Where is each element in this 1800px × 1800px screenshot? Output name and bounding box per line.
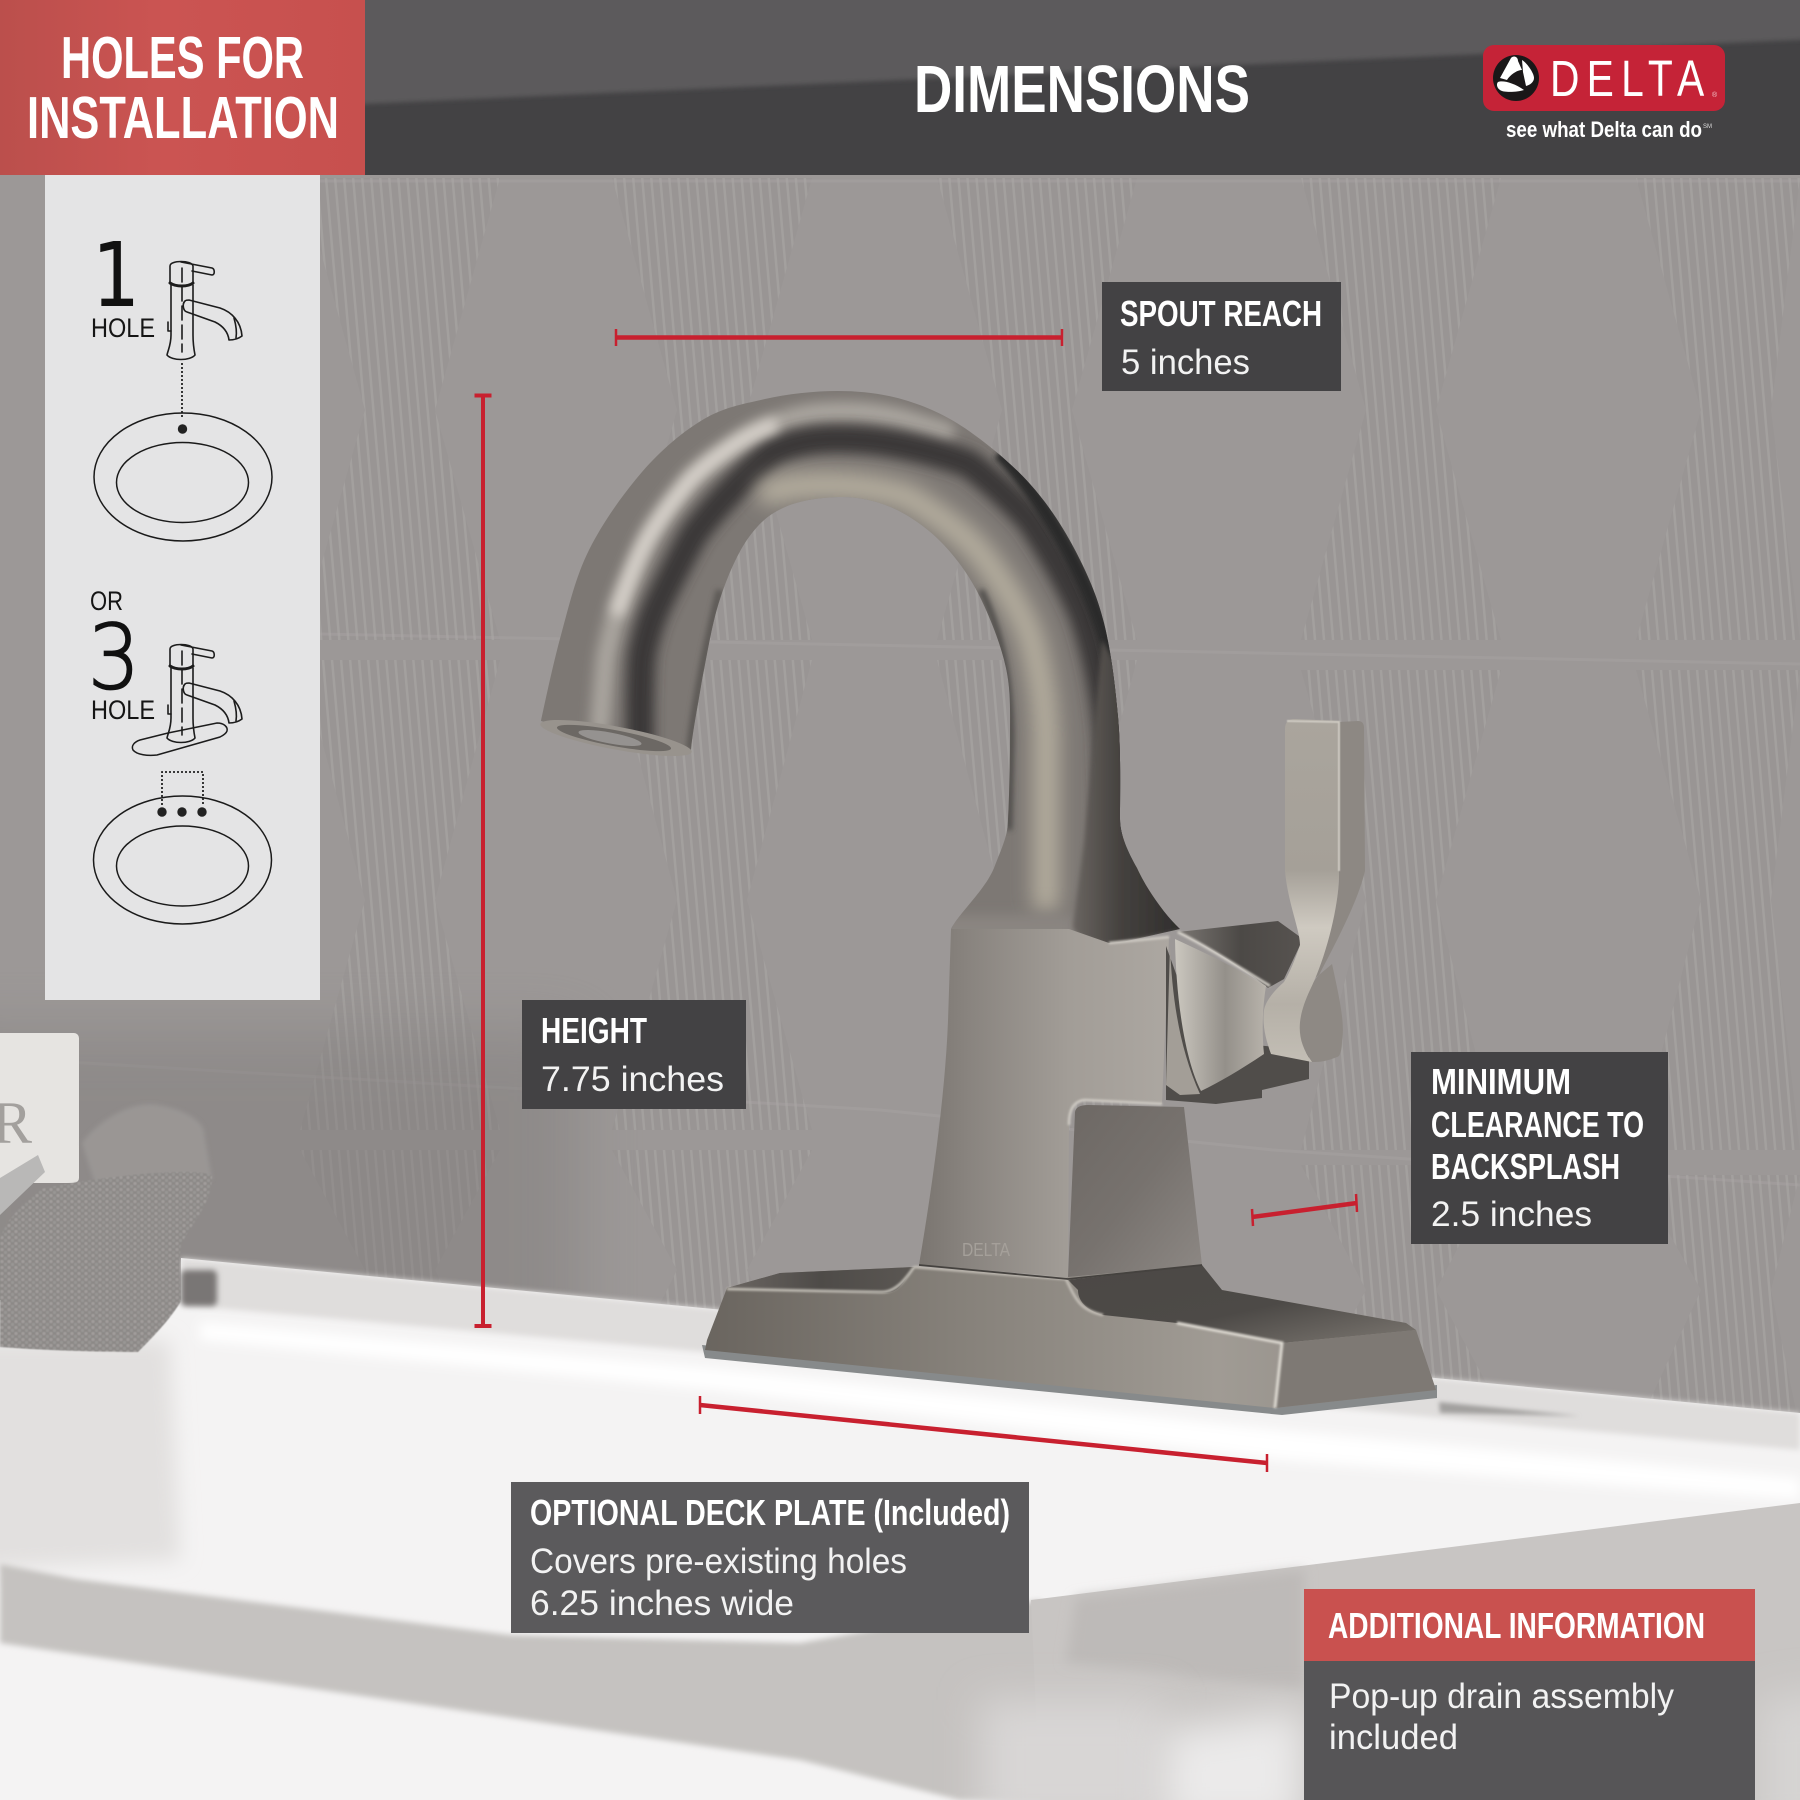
one hole option: HOLE — [91, 313, 155, 343]
engraved logo: DELTA — [962, 1240, 1010, 1260]
dimension line: height — [474, 395, 492, 1327]
callout: additional information — [1304, 1589, 1755, 1800]
icon: sink with one hole — [94, 363, 272, 541]
callout: additional information: Pop-up drain assembly — [1329, 1677, 1674, 1716]
one hole option: 1 — [92, 223, 140, 327]
neck shadow facet — [1073, 640, 1190, 945]
lower left wall shade — [0, 1030, 580, 1370]
left counter shading — [0, 1340, 180, 1570]
logo: Delta — [1483, 45, 1725, 142]
basin right side — [1031, 1503, 1800, 1800]
towel — [0, 1172, 212, 1352]
notch panel — [1068, 1105, 1202, 1277]
callout: spout reach: 5 inches — [1121, 343, 1250, 382]
neck shoulder blend — [952, 917, 1072, 930]
callout: additional information: included — [1329, 1718, 1458, 1757]
faucet body — [919, 929, 1202, 1279]
callout: minimum clearance: BACKSPLASH — [1431, 1146, 1620, 1187]
callout: additional information: ADDITIONAL INFORMATION — [1328, 1605, 1705, 1646]
one hole option — [91, 223, 272, 541]
three hole option: 3 — [88, 605, 140, 709]
faucet shadow — [1439, 1402, 1580, 1416]
callout: spout reach: SPOUT REACH — [1120, 293, 1322, 334]
sink counter — [0, 1258, 1800, 1800]
faucet — [520, 380, 1437, 1415]
chrome razor handle — [0, 1155, 45, 1215]
icon: sink with three holes — [94, 772, 272, 924]
grout lines — [0, 181, 1800, 1185]
callout: optional deck plate: OPTIONAL DECK PLATE (Included) — [530, 1492, 1010, 1533]
icon: faucet line drawing — [167, 262, 242, 360]
towel and soap — [0, 1033, 217, 1352]
callout: optional deck plate: 6.25 inches wide — [530, 1584, 794, 1623]
callout: minimum clearance: 2.5 inches — [1431, 1195, 1592, 1234]
callout: optional deck plate — [511, 1482, 1029, 1633]
callout: height — [522, 1000, 746, 1109]
handle hub — [1166, 921, 1309, 1104]
heading block: INSTALLATION — [27, 85, 339, 151]
icon: delta triangle mark — [1493, 55, 1539, 101]
spout — [520, 380, 1200, 950]
logo: Delta: SM — [1703, 124, 1712, 130]
deck plate base — [705, 1265, 1436, 1408]
dimension line: spout reach — [616, 329, 1062, 346]
callout: minimum clearance — [1411, 1052, 1668, 1244]
lever handle — [1263, 719, 1365, 1062]
tagline: see what Delta can do — [1506, 117, 1702, 142]
logo: Delta: DELTA — [1550, 50, 1711, 107]
three hole option — [88, 586, 272, 924]
bright band — [200, 1322, 1800, 1500]
logo: Delta: ® — [1712, 91, 1718, 99]
towel upper fold — [82, 1104, 212, 1200]
callout: minimum clearance: CLEARANCE TO — [1431, 1104, 1644, 1145]
callout: spout reach — [1102, 282, 1341, 391]
panel: holes for installation — [0, 0, 365, 1000]
basin shadow band — [0, 1564, 1100, 1800]
heading block — [0, 0, 365, 175]
heading block: HOLES FOR — [61, 25, 304, 91]
heading: dimensions: DIMENSIONS — [914, 52, 1250, 127]
three hole option: HOLE — [91, 695, 155, 725]
counter back strip — [181, 1258, 1800, 1450]
callout: height: HEIGHT — [541, 1010, 647, 1051]
icon: faucet with deck plate — [132, 644, 242, 755]
aerator — [538, 713, 694, 763]
soap bar — [0, 1033, 79, 1183]
dimension line: backsplash clearance — [1252, 1194, 1357, 1226]
gasket — [702, 1345, 1437, 1415]
dimension line: deck plate width — [700, 1396, 1267, 1472]
header bar — [340, 0, 1800, 175]
tile stripe pattern — [300, 178, 1800, 1430]
callout: height: 7.75 inches — [541, 1060, 724, 1099]
three hole option: OR — [90, 586, 123, 616]
callout: optional deck plate: Covers pre-existing holes — [530, 1542, 907, 1581]
callout: minimum clearance: MINIMUM — [1431, 1061, 1571, 1102]
